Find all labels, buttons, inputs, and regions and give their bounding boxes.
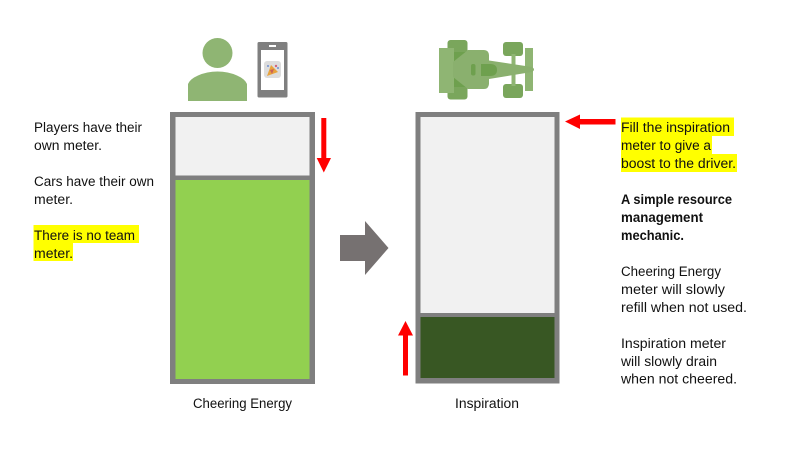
callout: highlighted goal text: Fill the inspiration <box>621 120 730 135</box>
text block: inspiration note: Inspiration meter <box>621 336 727 351</box>
icon: player silhouette <box>188 38 247 101</box>
text block: cheering energy note: refill when not used. <box>621 300 747 315</box>
panel: cheering energy meter <box>170 112 315 384</box>
text block: left notes: Players have their <box>34 120 142 135</box>
text block: left notes: Cars have their own <box>34 174 154 189</box>
text block: bold summary <box>621 192 732 243</box>
text block: cheering energy note <box>621 264 747 315</box>
text block: inspiration note <box>620 336 737 386</box>
text block: bold summary: management <box>621 210 703 225</box>
text block: left notes: own meter. <box>34 138 102 153</box>
text block: bold summary: A simple resource <box>621 192 732 207</box>
text block: cheering energy note: meter will slowly <box>621 282 725 297</box>
text block: cheering energy note: Cheering Energy <box>621 264 721 279</box>
text block: bold summary: mechanic. <box>621 228 684 243</box>
callout: highlighted goal text <box>621 118 737 172</box>
text block: inspiration note: will slowly drain <box>620 354 717 369</box>
meter empty portion <box>420 117 554 313</box>
meter empty portion <box>176 117 310 176</box>
text block: left notes <box>34 120 154 261</box>
meter fill: dark green <box>420 317 554 378</box>
arrow: fill inspiration from the top <box>565 114 616 129</box>
arrow: cheering energy drains <box>317 118 331 172</box>
icon: race car <box>439 40 534 100</box>
text block: left notes: meter. <box>34 246 73 261</box>
icon: phone with app <box>258 42 288 98</box>
text block: left notes: There is no team <box>34 228 135 243</box>
arrow: energy converts to inspiration <box>340 221 388 275</box>
label: inspiration: Inspiration <box>455 396 519 411</box>
text block: left notes: meter. <box>34 192 73 207</box>
meter fill: light green <box>176 180 310 379</box>
arrow: inspiration rises <box>398 321 413 376</box>
label: cheering energy: Cheering Energy <box>193 396 292 411</box>
callout: highlighted goal text: meter to give a <box>621 138 711 153</box>
callout: highlighted goal text: boost to the driver. <box>621 156 736 171</box>
panel: inspiration meter <box>416 112 560 384</box>
text block: inspiration note: when not cheered. <box>620 372 737 386</box>
